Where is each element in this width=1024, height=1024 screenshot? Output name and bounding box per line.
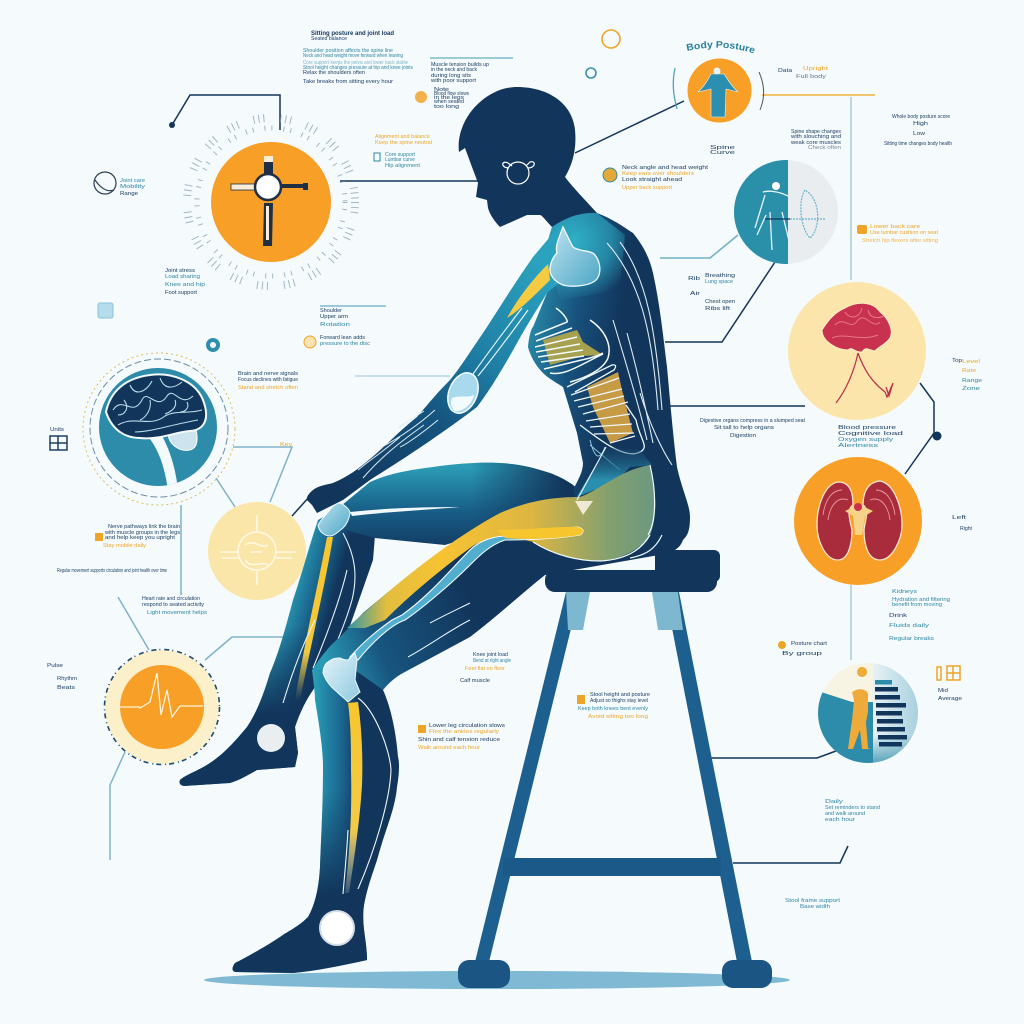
text: right notes: Spine shape changes <box>791 129 842 135</box>
text: right notes: Full body <box>796 74 827 80</box>
text: upper centre: Muscle tension builds up <box>431 62 489 68</box>
text: left lower notes: respond to seated activity <box>142 602 205 608</box>
text: below cross: Knee and hip <box>165 282 205 288</box>
icon: small square <box>98 303 113 318</box>
text: top centre: Core support keeps the pelvis and lower back stable <box>303 60 408 66</box>
lower leg, seated <box>232 670 399 973</box>
text: leg notes: Bend at right angle <box>473 658 511 664</box>
text: top centre: Sitting posture and joint load <box>311 31 394 37</box>
text: top centre: Stool height changes pressure at hip and knee joints <box>303 65 413 71</box>
knee joint, raised leg <box>318 503 350 536</box>
panel: joint circle <box>208 502 306 600</box>
text: right notes: Zone <box>962 386 980 392</box>
text: right notes <box>622 66 982 910</box>
text: leg notes: Feet flat on floor <box>465 666 505 672</box>
text: right notes: Hydration and filtering <box>892 597 950 603</box>
text: right notes: Check often <box>808 145 841 151</box>
text: right notes: Blood pressure <box>838 425 896 431</box>
icon: bar grid left <box>50 436 67 450</box>
text: right notes: Upper back support <box>622 185 673 191</box>
panel: posture bars <box>818 663 918 763</box>
text: orange note: Keep the spine neutral <box>375 140 432 146</box>
text: right notes: Alertness <box>838 443 879 449</box>
text: top centre: Shoulder position affects the spine line <box>303 48 393 54</box>
icon: teal ring <box>208 340 218 350</box>
text: right notes: Range <box>962 378 982 384</box>
text: right notes: Lung space <box>705 279 733 285</box>
text: right notes: Sitting time changes body health <box>884 141 952 147</box>
text: right notes: Use lumbar cushion on seat <box>870 230 939 236</box>
text: right notes: Curve <box>710 150 735 156</box>
text: upper centre: too long <box>434 104 459 110</box>
text: top centre: Seated balance <box>311 36 347 42</box>
text: leg notes <box>418 652 650 751</box>
text blocks <box>47 31 982 910</box>
panel: top body <box>672 41 764 122</box>
leg: raised foot <box>180 505 375 786</box>
pelvis <box>576 447 652 500</box>
text: left lower notes: Nerve pathways link the brain <box>108 524 180 530</box>
text: left globe note: Range <box>120 191 138 197</box>
upper leg, seated <box>312 465 685 700</box>
text: right notes: Base width <box>800 904 830 910</box>
text: right notes: Neck angle and head weight <box>622 165 709 171</box>
text: left lower notes: Pulse <box>47 663 63 669</box>
text: upper centre <box>431 62 489 110</box>
text: left globe note: Joint care <box>120 178 145 184</box>
icon: standing figure <box>848 667 870 749</box>
icon: orange tag <box>857 225 867 234</box>
text: right notes: Low <box>913 131 925 137</box>
text: right notes: and walk around <box>825 811 865 817</box>
stool legs <box>475 592 752 962</box>
text: shoulder note: pressure to the disc <box>320 341 371 347</box>
text: leg notes: Keep both knees bent evenly <box>578 706 649 712</box>
ear icon <box>503 162 534 184</box>
text: right notes: Chest open <box>705 299 735 305</box>
text: right notes: Kidneys <box>892 589 918 595</box>
text: shoulder note: Upper arm <box>320 314 348 320</box>
icon: small orange square <box>95 533 103 541</box>
ankle joints <box>257 724 285 752</box>
text: right notes: Top <box>952 358 962 364</box>
text: right notes: Fluids daily <box>889 623 930 629</box>
panel: red brain <box>788 282 926 420</box>
text: leg notes: Calf muscle <box>460 678 490 684</box>
ground shadow <box>204 971 790 989</box>
text: right notes: Stool frame support <box>785 898 841 904</box>
text: leg notes: Shin and calf tension reduce <box>418 737 500 743</box>
text: upper centre: Note <box>434 87 449 93</box>
text: right notes: with slouching and <box>791 134 841 140</box>
text: right notes: Posture chart <box>791 641 828 647</box>
text: orange note <box>375 134 432 169</box>
text: shoulder note <box>320 308 371 347</box>
text: right notes: Oxygen supply <box>838 437 894 443</box>
torso <box>528 213 690 565</box>
text: top centre: Relax the shoulders often <box>303 70 365 76</box>
text: brain note: Brain and nerve signals <box>238 371 299 377</box>
text: leg notes: Stool height and posture <box>590 692 650 698</box>
text: right notes: Ribs lift <box>705 306 731 312</box>
text: right notes: Digestive organs compress in a slumped seat <box>700 418 806 424</box>
text: right notes: Stretch hip flexors after sitting <box>862 238 938 244</box>
knee joint, seated leg <box>323 653 360 702</box>
text: right notes: Rib <box>688 276 700 282</box>
bone tip <box>575 501 593 515</box>
text: right notes: Air <box>690 291 701 297</box>
text: upper centre: in the legs <box>434 95 465 101</box>
text: left lower notes: and help keep you upright <box>105 535 176 541</box>
text: top centre <box>303 31 413 85</box>
text: left lower notes: Beats <box>57 685 76 691</box>
text: right notes: Digestion <box>730 433 756 439</box>
elbow joint <box>442 368 484 418</box>
text: upper centre: with poor support <box>431 78 477 84</box>
text: right notes: Average <box>938 696 962 702</box>
icon: orange dot <box>603 168 617 182</box>
stool crossbar <box>503 858 721 876</box>
text: right notes: Left <box>952 515 967 521</box>
text: leg notes: Flex the ankles regularly <box>429 729 500 735</box>
panel: heart rhythm <box>104 650 220 764</box>
stool seat <box>545 550 720 592</box>
text: right notes: Lower back care <box>870 224 920 230</box>
text: top centre: Take breaks from sitting every hour <box>303 79 393 85</box>
icon: amber square lower <box>418 725 426 733</box>
text: right notes: High <box>913 121 928 127</box>
lower ribs <box>567 365 644 470</box>
text: right notes: benefit from moving <box>892 602 942 608</box>
icon: orange flower <box>304 336 316 348</box>
text: right notes: Rate <box>962 368 976 374</box>
text: right notes: Right <box>960 526 973 532</box>
text: right notes: Level <box>962 359 980 365</box>
arm <box>307 225 575 513</box>
text: right notes: Mid <box>938 688 948 694</box>
icon: cross joint <box>231 156 308 246</box>
text: upper centre: when seated <box>434 99 464 105</box>
text: right notes: Look straight ahead <box>622 177 682 183</box>
text: right notes: Daily <box>825 799 844 805</box>
text: brain note: Focus declines with fatigue <box>238 377 298 383</box>
text: below cross <box>165 268 205 296</box>
text: right notes: Upright <box>803 66 829 72</box>
text: right notes: each hour <box>825 817 855 823</box>
text: right notes: weak core muscles <box>791 140 842 146</box>
icon: orange grid right <box>937 666 960 680</box>
shoulder joint <box>550 227 600 286</box>
text: orange note: Hip alignment <box>385 163 421 169</box>
text: left lower notes: Regular movement supports circulation and joint health over time <box>57 568 167 574</box>
icon: top orange ring <box>602 30 620 48</box>
text: brain note <box>238 371 299 391</box>
panel: kidneys <box>794 457 922 585</box>
text: left lower notes: Light movement helps <box>147 610 208 616</box>
text: upper centre: in the neck and back <box>431 67 477 73</box>
stool <box>458 550 772 988</box>
text: right notes: Whole body posture score <box>892 114 950 120</box>
text: right notes: Regular breaks <box>889 636 935 642</box>
text: left globe note: Mobility <box>120 184 146 190</box>
panel: split figure <box>734 160 838 264</box>
icon: brain <box>106 374 206 490</box>
text: right notes: Spine <box>710 145 735 151</box>
text: shoulder note: Forward lean adds <box>320 335 366 341</box>
text: right notes: Drink <box>889 613 908 619</box>
panel: brain <box>83 353 235 505</box>
icon: orange globe <box>415 91 427 103</box>
text: right notes: By group <box>782 651 822 657</box>
text: orange note: Alignment and balance <box>375 134 430 140</box>
text: leg notes: Knee joint load <box>473 652 508 658</box>
text: below cross: Foot support <box>165 290 198 296</box>
text: right notes: Keep ears over shoulders <box>622 171 695 177</box>
text: below cross: Load sharing <box>165 274 200 280</box>
text: below cross: Joint stress <box>165 268 196 274</box>
text: left lower notes: Rhythm <box>57 676 77 682</box>
text: shoulder note: Shoulder <box>320 308 342 314</box>
upper thigh, raised leg <box>330 463 590 545</box>
thigh bone <box>350 527 583 660</box>
icon: teal square <box>374 153 380 161</box>
back muscle lines <box>607 242 672 465</box>
text: right notes: Sit tall to help organs <box>714 425 775 431</box>
text: right notes: Data <box>778 68 792 74</box>
text: upper centre: during long sits <box>431 73 472 79</box>
text: leg notes: Adjust so thighs stay level <box>590 698 648 704</box>
figure <box>180 87 690 973</box>
text: left globe note <box>120 178 146 197</box>
text: orange note: Core support <box>385 152 416 158</box>
upper ribs <box>535 308 609 382</box>
text: left lower notes: Heart rate and circulation <box>142 596 200 602</box>
text: leg notes: Walk around each hour <box>418 745 480 751</box>
text: right notes: Cognitive load <box>838 431 903 437</box>
text: brain note: Stand and stretch often <box>238 385 298 391</box>
text: right notes: Breathing <box>705 273 735 279</box>
text: left lower notes <box>47 427 293 691</box>
icon: orange posture dot <box>778 641 786 649</box>
text: leg notes: Avoid sitting too long <box>588 714 648 720</box>
text: shoulder note: Rotation <box>320 322 350 328</box>
posture bars chart <box>875 680 907 746</box>
panel: alignment cross <box>187 118 355 286</box>
text: right notes: Set reminders to stand <box>825 805 880 811</box>
text: left lower notes: Key <box>280 442 293 448</box>
icon: amber square <box>577 695 585 704</box>
connector lines <box>110 58 934 863</box>
text: top centre: Neck and head weight move forward when leaning <box>303 53 403 59</box>
text: left lower notes: Units <box>50 427 65 433</box>
stool feet <box>458 960 772 988</box>
heading: Body Posture <box>686 41 754 53</box>
text: orange note: Lumbar curve <box>385 157 415 163</box>
text: leg notes: Lower leg circulation slows <box>429 723 506 729</box>
icon: top teal ring <box>586 68 596 78</box>
text: left lower notes: Stay mobile daily <box>103 543 147 549</box>
text: left lower notes: with muscle groups in the legs <box>105 530 181 536</box>
text: upper centre: Blood flow slows <box>434 91 469 97</box>
head and neck <box>459 87 600 245</box>
icon: left globe <box>94 172 116 194</box>
